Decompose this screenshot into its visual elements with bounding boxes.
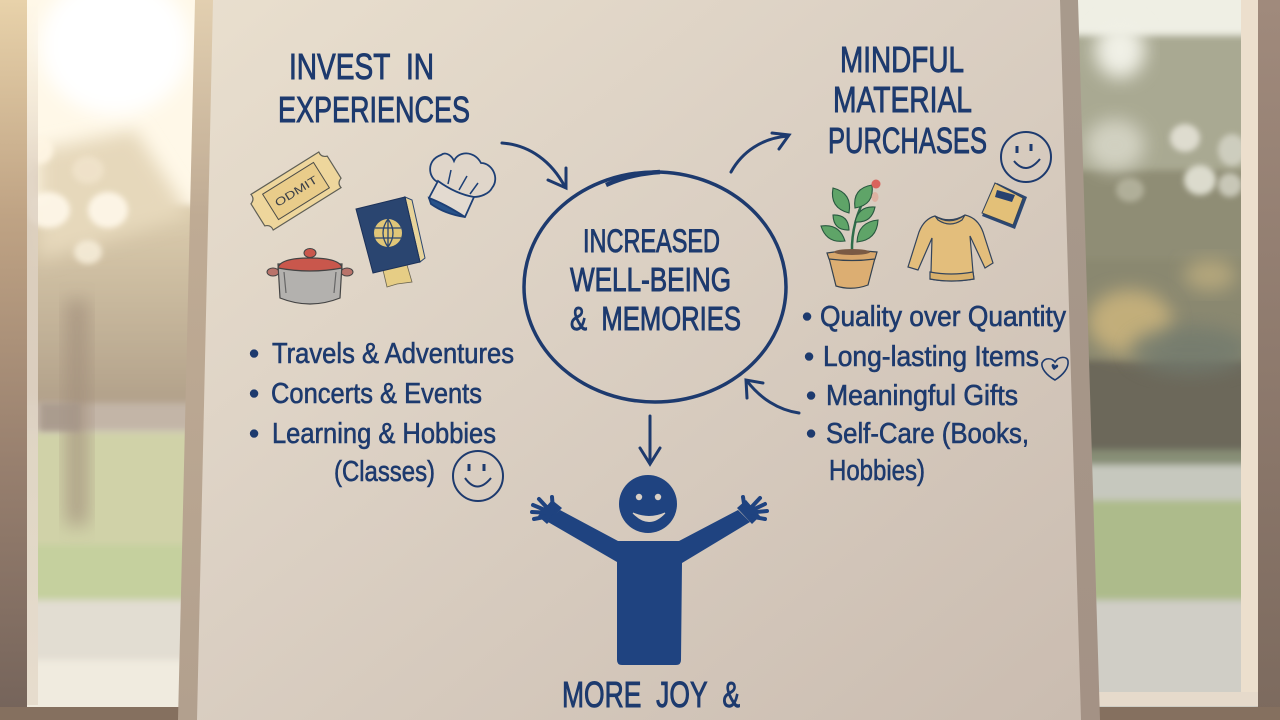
icon: book (982, 183, 1027, 229)
icon: happy person (532, 475, 767, 665)
list: experiences: Concerts & Events (271, 378, 482, 410)
heading: mindful material purchases: PURCHASES (828, 120, 987, 161)
list: purchases: • (806, 380, 816, 412)
window sill (0, 707, 1280, 720)
heading: invest in experiences: INVEST IN (289, 46, 434, 87)
list: experiences: (Classes) (334, 456, 435, 488)
label: more joy: MORE JOY & (562, 674, 740, 715)
list: purchases: Long-lasting Items (823, 341, 1039, 373)
heading: invest in experiences (278, 46, 470, 130)
heading: mindful material purchases (828, 39, 987, 161)
icon: potted plant (821, 180, 880, 288)
heading: mindful material purchases: MATERIAL (833, 79, 972, 120)
list: experiences: • (249, 418, 259, 450)
list: purchases: Hobbies) (829, 455, 925, 487)
whiteboard surface (197, 0, 1081, 720)
window frame right (1080, 0, 1280, 720)
icon: passport (356, 197, 425, 287)
icon: ticket: ODMIT (273, 174, 320, 210)
list: purchases: Self-Care (Books, (826, 418, 1029, 450)
list: purchases: Quality over Quantity (820, 301, 1066, 333)
whiteboard frame: right (1059, 0, 1100, 720)
centre text: & MEMORIES (570, 300, 741, 337)
icon: heart (1042, 357, 1068, 380)
list: purchases: • (806, 418, 816, 450)
icon: ticket (247, 149, 345, 233)
icon: cooking pot (267, 248, 353, 304)
heading: invest in experiences: EXPERIENCES (278, 89, 470, 130)
centre circle (524, 172, 786, 402)
list: purchases: • (804, 341, 814, 373)
icon: chef hat (429, 153, 495, 217)
arrow: experiences to centre (502, 143, 566, 188)
heading: mindful material purchases: MINDFUL (840, 39, 964, 80)
icon: smiley left (453, 451, 503, 501)
window frame left (0, 0, 38, 720)
list: purchases: • (802, 301, 812, 333)
arrow: centre to person (640, 416, 660, 464)
right glass scene (1060, 0, 1260, 720)
list: experiences: • (249, 338, 259, 370)
list: experiences (249, 338, 514, 488)
centre text (570, 223, 741, 337)
list: experiences: Learning & Hobbies (272, 418, 496, 450)
icon: smiley right (1001, 132, 1051, 182)
arrow: centre to purchases (731, 133, 789, 172)
centre text: INCREASED (583, 223, 720, 259)
left glass scene (10, 0, 210, 720)
centre text: WELL-BEING (570, 261, 731, 298)
list: experiences: • (249, 378, 259, 410)
icon: sweater (908, 215, 993, 281)
arrow: purchases to centre (746, 380, 799, 413)
list: purchases (802, 301, 1066, 487)
list: experiences: Travels & Adventures (272, 338, 514, 370)
whiteboard frame: left (178, 0, 214, 720)
list: purchases: Meaningful Gifts (826, 380, 1018, 412)
